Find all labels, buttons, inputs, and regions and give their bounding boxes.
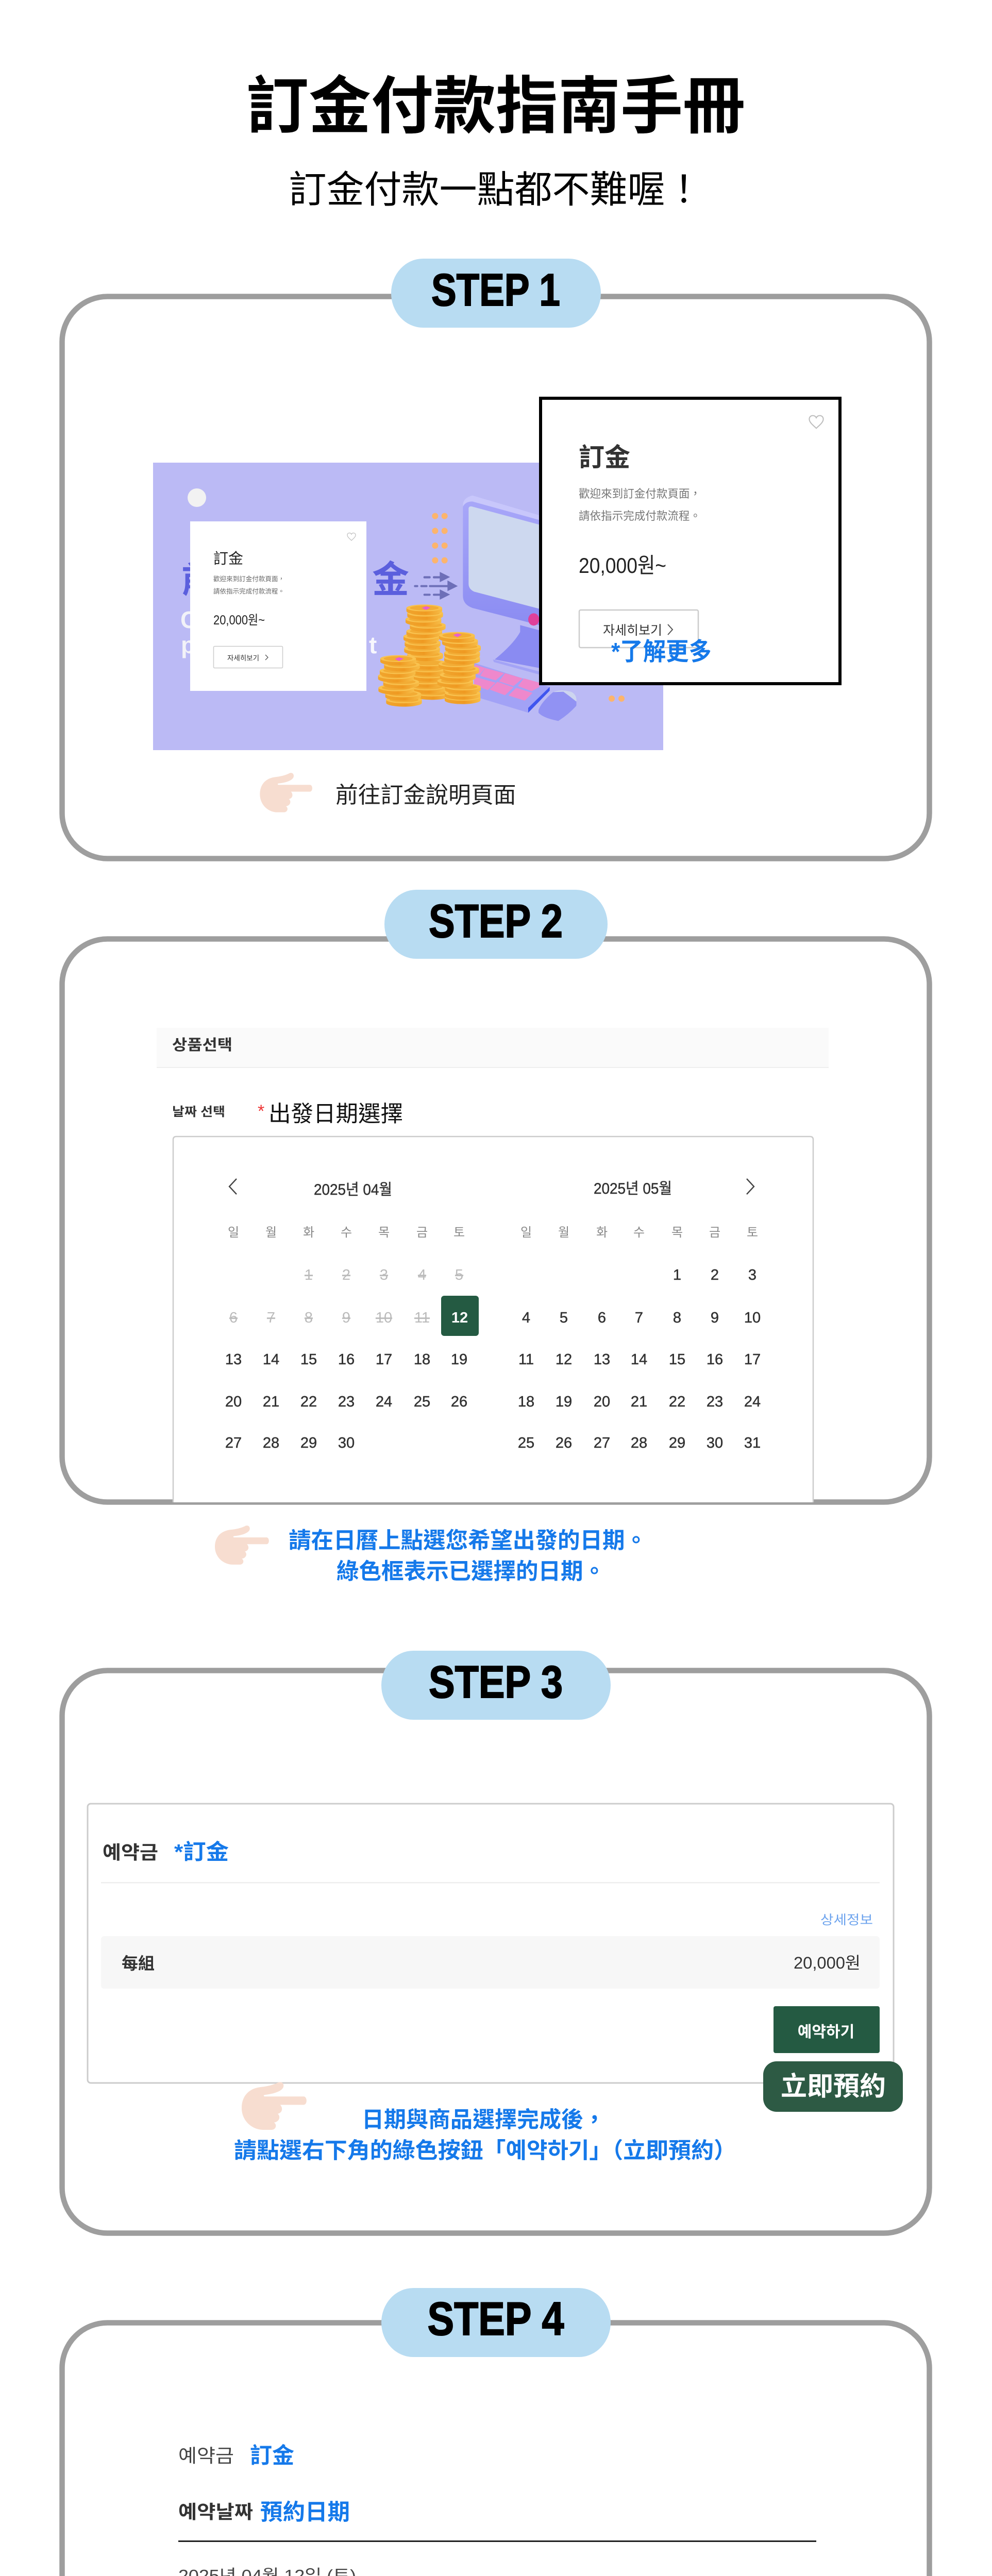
caption: choose date: 綠色框表示已選擇的日期。 <box>337 1560 606 1584</box>
booking date section: 預約日期 <box>260 2500 350 2525</box>
step 1 badge: STEP 1 <box>431 264 560 315</box>
icon: pointing hand <box>215 1526 269 1565</box>
step 1 badge <box>391 259 601 328</box>
calendar: 28 <box>631 1435 647 1451</box>
calendar: 화 <box>303 1226 314 1240</box>
calendar: 12 <box>451 1310 468 1326</box>
calendar: 월 <box>265 1226 277 1240</box>
calendar: 15 <box>669 1351 685 1368</box>
calendar: 9 <box>342 1310 350 1326</box>
calendar: 22 <box>300 1394 317 1410</box>
calendar: 토 <box>747 1226 758 1240</box>
step 2 badge <box>384 890 608 959</box>
calendar: 20 <box>594 1394 610 1410</box>
calendar: 21 <box>631 1394 647 1410</box>
calendar: 14 <box>263 1351 279 1368</box>
calendar: 2 <box>711 1267 719 1283</box>
purple banner illustration: p <box>181 632 195 658</box>
calendar: 30 <box>338 1435 355 1451</box>
calendar: 13 <box>225 1351 242 1368</box>
calendar: 21 <box>263 1394 279 1410</box>
date label: 날짜 선택 <box>172 1105 225 1119</box>
calendar: 10 <box>744 1310 761 1326</box>
purple banner illustration: 金 <box>372 560 409 601</box>
step 4 badge <box>381 2288 611 2357</box>
calendar: 27 <box>594 1435 610 1451</box>
calendar: 목 <box>378 1226 390 1240</box>
enlarged product card: 20,000원~ <box>579 553 666 578</box>
calendar: 6 <box>229 1310 238 1326</box>
calendar: 19 <box>556 1394 572 1410</box>
booking card: 상세정보 <box>820 1913 873 1927</box>
calendar: 29 <box>300 1435 317 1451</box>
subtitle: 訂金付款一點都不難喔！ <box>289 169 703 211</box>
calendar: 15 <box>300 1351 317 1368</box>
small product card: 자세히보기 <box>227 654 259 662</box>
calendar: 18 <box>518 1394 534 1410</box>
caption: go to deposit page: 前往訂金說明頁面 <box>335 783 516 808</box>
calendar: 17 <box>744 1351 761 1368</box>
enlarged product card: 歡迎來到訂金付款頁面， <box>579 487 701 500</box>
badge: book now: 立即預約 <box>781 2072 886 2101</box>
calendar: 30 <box>707 1435 723 1451</box>
calendar: 27 <box>225 1435 242 1451</box>
date label: * <box>258 1101 264 1121</box>
purple banner illustration: t <box>369 632 377 658</box>
calendar: 9 <box>711 1310 719 1326</box>
caption: press reserve <box>234 2108 736 2163</box>
calendar: 22 <box>669 1394 685 1410</box>
date label: 出發日期選擇 <box>268 1102 403 1127</box>
booking card: *訂金 <box>174 1840 229 1864</box>
booking summary heading: 訂金 <box>250 2444 294 2468</box>
enlarged product card <box>541 398 840 684</box>
booking date section <box>178 2500 816 2576</box>
calendar: 29 <box>669 1435 685 1451</box>
calendar: 7 <box>635 1310 643 1326</box>
calendar: 25 <box>518 1435 534 1451</box>
calendar: 3 <box>380 1267 388 1283</box>
icon: pointing hand <box>260 773 312 812</box>
small product card: 訂金 <box>213 550 243 567</box>
calendar: 2025년 04월 <box>314 1181 392 1198</box>
step 2 badge: STEP 2 <box>429 895 563 947</box>
step 3 badge: STEP 3 <box>429 1656 563 1707</box>
calendar: 26 <box>556 1435 572 1451</box>
booking card: 예약금 <box>103 1842 158 1863</box>
reserve button: 예약하기 <box>798 2024 854 2041</box>
calendar: 10 <box>376 1310 392 1326</box>
calendar: 24 <box>744 1394 761 1410</box>
calendar: 14 <box>631 1351 647 1368</box>
calendar: 금 <box>416 1226 428 1240</box>
calendar: 일 <box>520 1226 532 1240</box>
small product card <box>190 521 366 691</box>
calendar: 2 <box>342 1267 350 1283</box>
calendar: 2025년 05월 <box>594 1180 672 1197</box>
calendar: 26 <box>451 1394 467 1410</box>
caption: choose date <box>289 1529 647 1584</box>
calendar: 수 <box>633 1226 645 1240</box>
calendar: 금 <box>709 1226 720 1240</box>
enlarged product card: 자세히보기 <box>603 623 662 638</box>
calendar: 8 <box>673 1310 681 1326</box>
calendar: 4 <box>522 1310 530 1326</box>
reserve button <box>774 2006 880 2053</box>
calendar: 8 <box>305 1310 313 1326</box>
small product card: 20,000원~ <box>213 613 265 628</box>
calendar: 수 <box>341 1226 352 1240</box>
booking card: 20,000원 <box>794 1954 861 1972</box>
panel: step 3 <box>62 1651 930 2233</box>
caption: press reserve: 請點選右下角的綠色按鈕「예약하기」（立即預約） <box>234 2139 736 2163</box>
calendar: 11 <box>518 1351 534 1368</box>
booking card <box>88 1804 894 2083</box>
calendar <box>173 1137 813 1502</box>
calendar: 23 <box>707 1394 723 1410</box>
purple banner illustration <box>153 463 663 750</box>
booking date section: 예약날짜 <box>178 2501 253 2522</box>
calendar: 18 <box>414 1351 430 1368</box>
calendar: 토 <box>453 1226 465 1240</box>
calendar: 6 <box>598 1310 606 1326</box>
calendar: 13 <box>594 1351 610 1368</box>
calendar: 5 <box>560 1310 568 1326</box>
calendar: 3 <box>748 1267 756 1283</box>
calendar: 11 <box>414 1310 430 1326</box>
enlarged product card: 訂金 <box>579 443 630 472</box>
panel: step 2 <box>62 890 930 1502</box>
panel: step 4 <box>62 2288 930 2576</box>
caption: choose date: 請在日曆上點選您希望出發的日期。 <box>289 1529 647 1553</box>
calendar: 4 <box>418 1267 426 1283</box>
calendar: 24 <box>376 1394 392 1410</box>
caption: press reserve: 日期與商品選擇完成後， <box>362 2108 606 2132</box>
calendar: 28 <box>263 1435 279 1451</box>
purple banner illustration: 前 <box>181 560 217 600</box>
section header: 상품선택 <box>172 1037 232 1054</box>
calendar: 20 <box>225 1394 242 1410</box>
purple banner illustration: C <box>180 606 197 633</box>
calendar: 월 <box>558 1226 569 1240</box>
calendar: 19 <box>451 1351 467 1368</box>
panel: step 1 <box>62 259 930 858</box>
step 4 badge: STEP 4 <box>428 2293 564 2345</box>
calendar: 목 <box>671 1226 683 1240</box>
title: 訂金付款指南手冊 <box>246 71 745 141</box>
calendar: 7 <box>267 1310 275 1326</box>
step 3 badge <box>381 1651 611 1720</box>
calendar: 일 <box>228 1226 239 1240</box>
icon: pointing hand <box>242 2082 307 2130</box>
calendar: 25 <box>414 1394 430 1410</box>
booking card: 每組 <box>122 1954 155 1973</box>
calendar: 16 <box>707 1351 723 1368</box>
calendar: 31 <box>744 1435 761 1451</box>
small product card: 請依指示完成付款流程。 <box>213 587 284 595</box>
badge: book now <box>763 2061 903 2112</box>
callout: learn more: *了解更多 <box>611 638 712 666</box>
section header <box>157 1028 829 1068</box>
booking summary heading: 예약금 <box>178 2445 234 2466</box>
booking summary heading <box>178 2444 294 2468</box>
small product card: 歡迎來到訂金付款頁面， <box>213 575 284 583</box>
calendar: 화 <box>596 1226 608 1240</box>
calendar: 23 <box>338 1394 355 1410</box>
calendar: 17 <box>376 1351 392 1368</box>
calendar: 1 <box>673 1267 681 1283</box>
calendar: 16 <box>338 1351 355 1368</box>
calendar: 12 <box>556 1351 572 1368</box>
enlarged product card: 請依指示完成付款流程。 <box>579 510 701 522</box>
calendar: 1 <box>305 1267 313 1283</box>
calendar: 5 <box>455 1267 463 1283</box>
date label <box>172 1101 403 1127</box>
